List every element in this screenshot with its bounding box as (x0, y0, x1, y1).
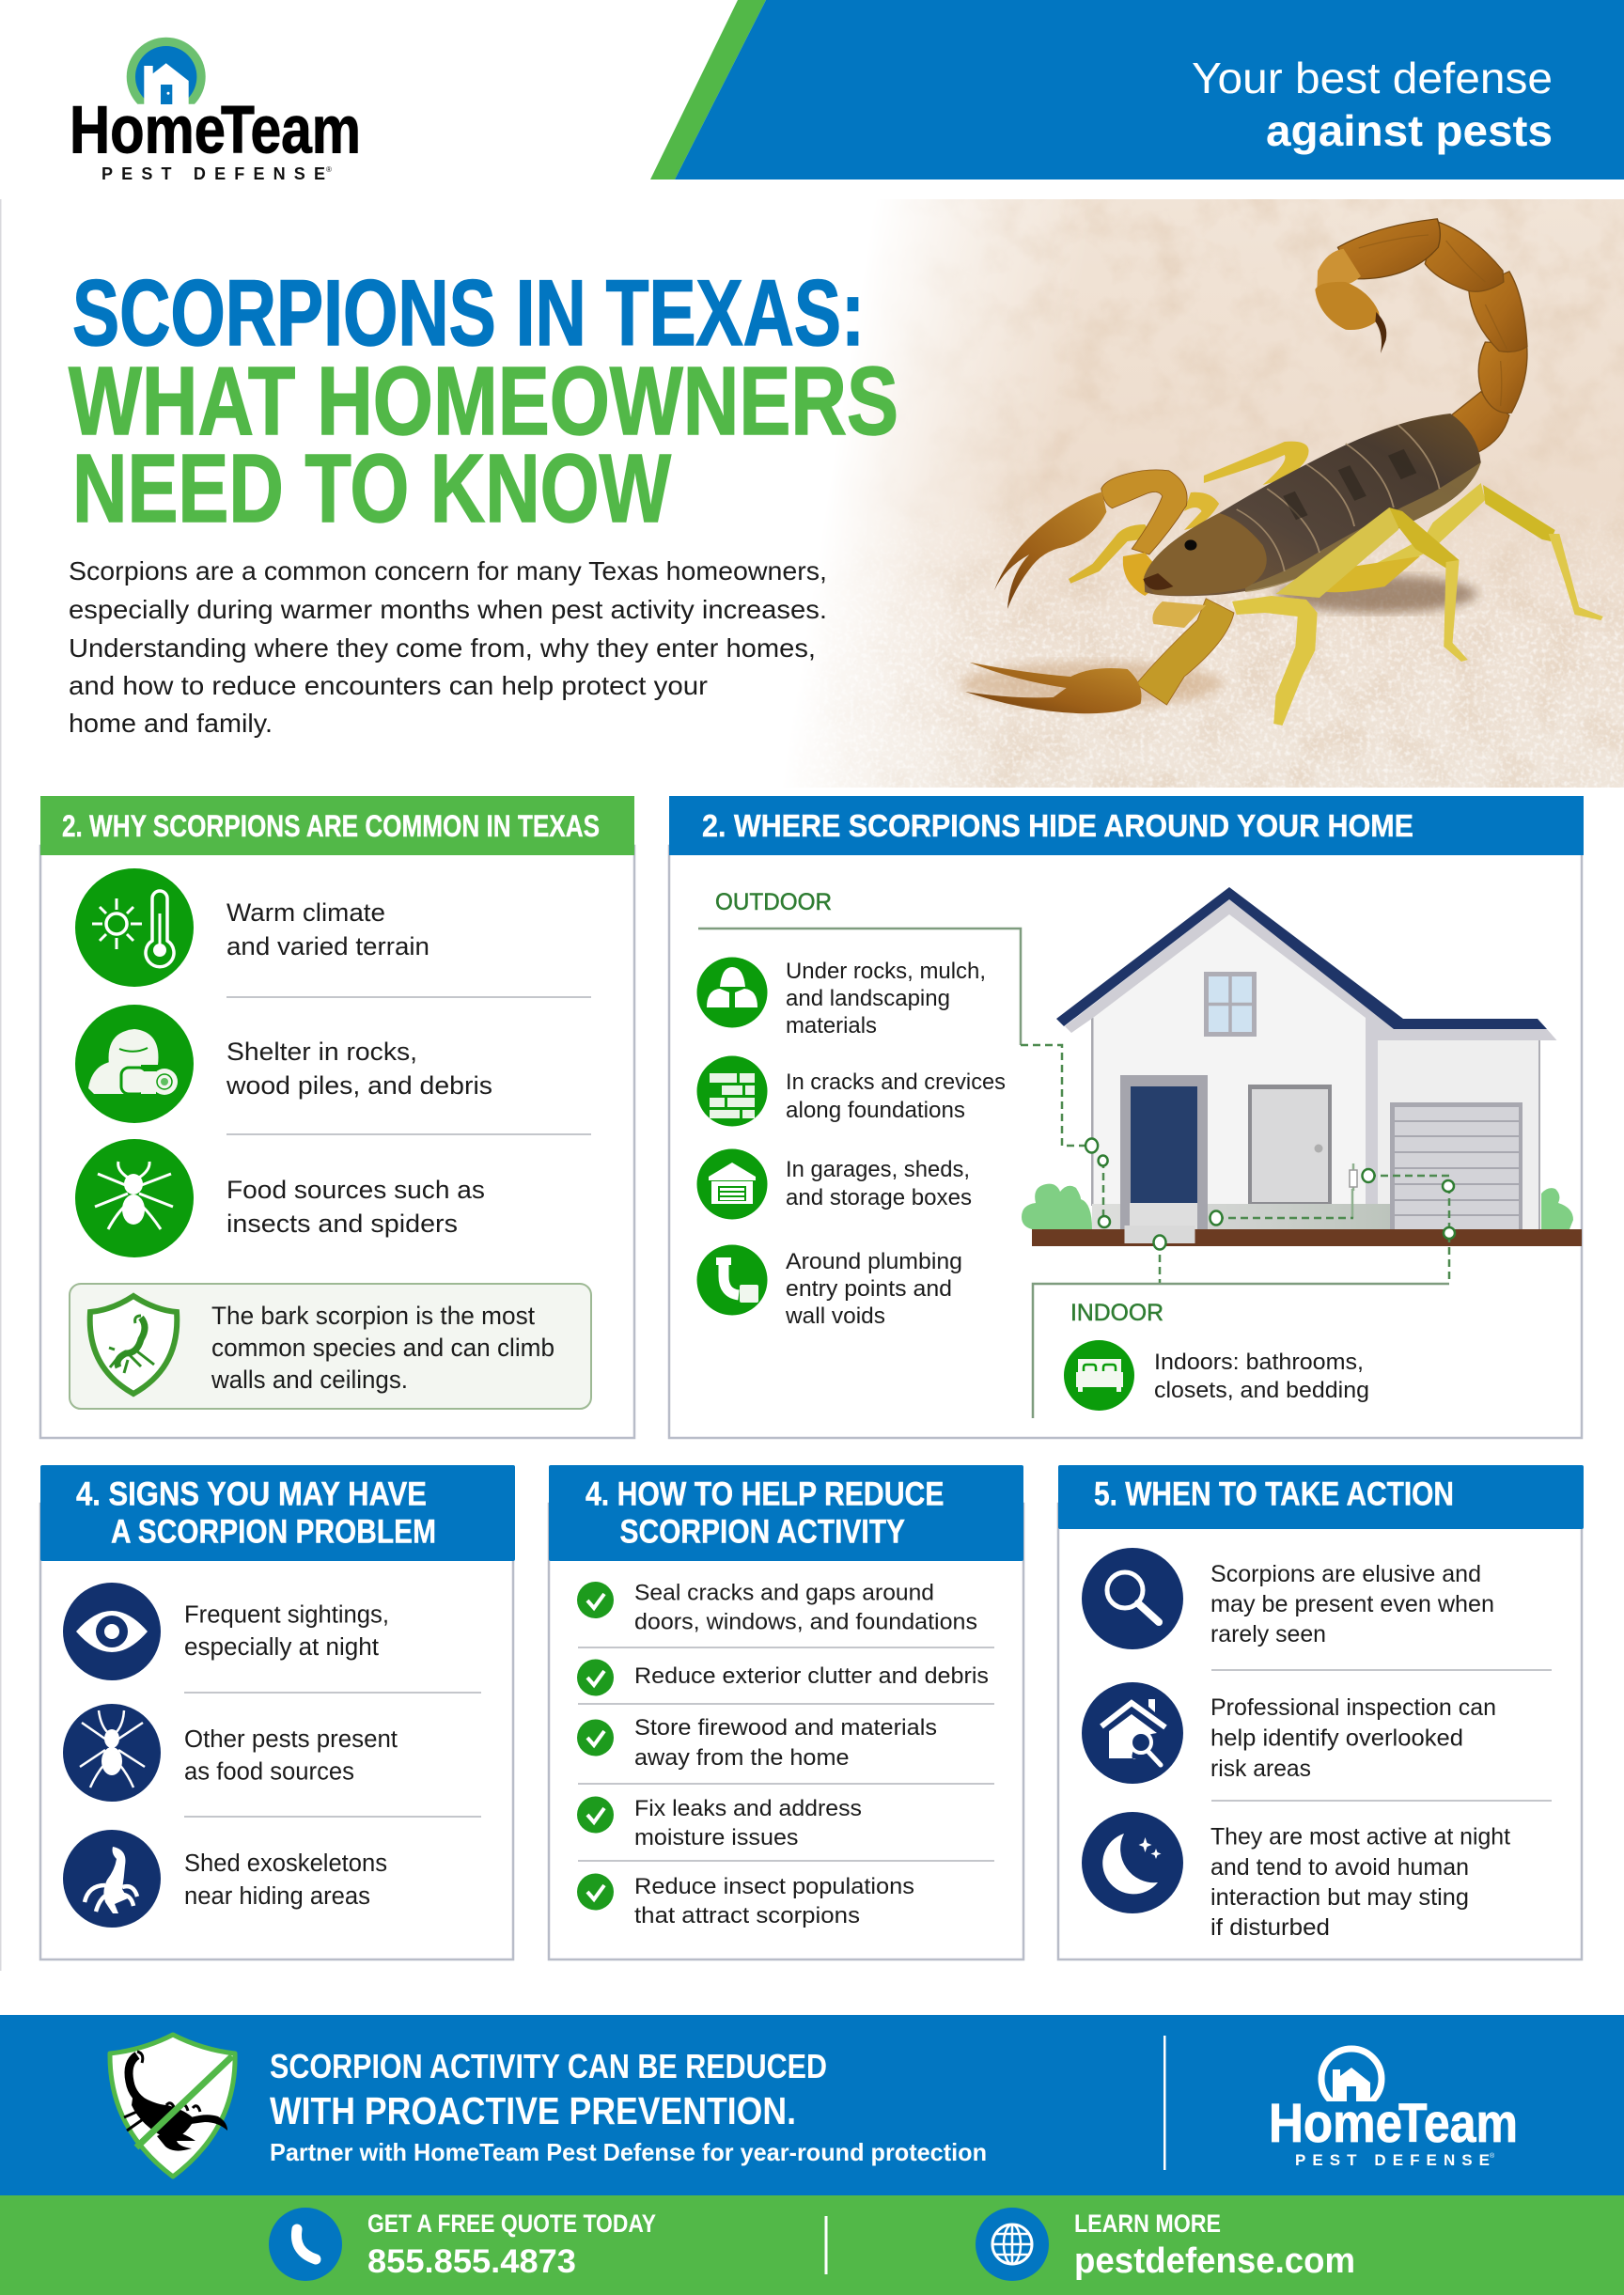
panel header: 5. WHEN TO TAKE ACTION (1094, 1475, 1454, 1513)
logo: white HomeTeam: PEST DEFENSE (1295, 2151, 1490, 2169)
text: active at night: They are most active at night (1210, 1823, 1510, 1850)
logo: white HomeTeam: Team (1398, 2093, 1518, 2154)
text: warm climate (226, 898, 429, 960)
house illustration (1021, 887, 1582, 1284)
tail segments (1451, 392, 1509, 452)
text: plumbing (785, 1249, 962, 1329)
panel: signs of a scorpion problem (40, 1465, 515, 1959)
icon: plumbing (697, 1244, 767, 1316)
text: warm climate: Warm climate (226, 898, 385, 927)
icon: bed (1064, 1340, 1134, 1411)
icon: insect (63, 1704, 161, 1802)
text: inspection (1210, 1694, 1496, 1782)
icon: brick wall (697, 1056, 767, 1126)
steps (1130, 1203, 1197, 1229)
panel header (40, 796, 634, 855)
text: website (1074, 2209, 1355, 2281)
logo: HomeTeam Pest Defense: Home (70, 94, 226, 168)
heading: outdoor: OUTDOOR (715, 889, 832, 915)
panel header: 4. HOW TO HELP REDUCE (586, 1475, 944, 1513)
outdoor bracket line (698, 929, 1021, 1045)
text: under rocks (786, 959, 986, 1038)
checklist item: firewood (577, 1715, 937, 1771)
checklist item: insects: Reduce insect populations (634, 1874, 914, 1899)
back legs (1069, 442, 1309, 584)
text: other pests (184, 1726, 398, 1786)
ground (1032, 1229, 1582, 1246)
panel header (1058, 1465, 1584, 1529)
panel header (669, 796, 1584, 855)
icon: eye (63, 1583, 161, 1680)
icon: phone (269, 2208, 342, 2281)
text: food sources: Food sources such as (226, 1176, 485, 1204)
text: active at night: interaction but may sting (1210, 1884, 1469, 1911)
callout: bark scorpion (70, 1284, 591, 1409)
text: frequent sightings: especially at night (184, 1634, 379, 1661)
tagline: against pests (1266, 106, 1553, 155)
text: warm climate: and varied terrain (226, 932, 429, 960)
panel header: SCORPION ACTIVITY (620, 1513, 905, 1551)
leader lines (1021, 1045, 1449, 1284)
title: NEED TO KNOW (72, 434, 672, 542)
foundation (1092, 1204, 1393, 1229)
checklist item: leaks: Fix leaks and address (634, 1796, 862, 1821)
title (69, 260, 898, 542)
checklist item: seal cracks: Seal cracks and gaps around (634, 1581, 934, 1605)
roof (1056, 887, 1547, 1029)
text: bark scorpion (211, 1302, 554, 1394)
contact bar (0, 2195, 1624, 2295)
text: shed exoskeletons: Shed exoskeletons (184, 1850, 387, 1877)
icon: scorpion (63, 1830, 161, 1928)
checklist item: seal cracks: doors, windows, and foundations (634, 1609, 977, 1635)
text: cracks (786, 1069, 1006, 1123)
garage door (1390, 1102, 1522, 1229)
checklist item: firewood: Store firewood and materials (634, 1715, 937, 1741)
heading: indoor: INDOOR (1070, 1300, 1163, 1326)
text: garages: and storage boxes (786, 1185, 972, 1210)
intro paragraph: and how to reduce encounters can help protect your (69, 671, 708, 700)
panel: when to take action (1058, 1465, 1584, 1959)
hero photo background (752, 199, 1624, 788)
body (1144, 414, 1481, 596)
text: elusive: may be present even when (1210, 1591, 1494, 1617)
front legs (1232, 507, 1468, 726)
text: other pests: Other pests present (184, 1726, 398, 1753)
panel header: 2. WHY SCORPIONS ARE COMMON IN TEXAS (62, 809, 600, 843)
front door (1120, 1075, 1208, 1231)
text: bark scorpion: common species and can climb (211, 1334, 554, 1362)
text: inspection: risk areas (1210, 1756, 1311, 1782)
logo: HomeTeam Pest Defense: Team (221, 94, 361, 168)
checklist item: leaks (577, 1796, 862, 1850)
logo: white HomeTeam: Home (1269, 2093, 1402, 2154)
text: bark scorpion: walls and ceilings. (211, 1366, 408, 1394)
checklist item: seal cracks (577, 1581, 977, 1635)
text: quote: 855.855.4873 (367, 2243, 576, 2280)
text: indoors (1154, 1350, 1369, 1403)
text: other pests: as food sources (184, 1759, 354, 1786)
left edge rule (0, 199, 2, 1971)
intro paragraph: Understanding where they come from, why they enter homes, (69, 633, 816, 663)
banner text (270, 2047, 987, 2166)
banner text: Partner with HomeTeam Pest Defense for year-round protection (270, 2138, 987, 2166)
text: indoors: closets, and bedding (1154, 1378, 1369, 1403)
text: cracks: along foundations (786, 1098, 965, 1123)
eye (1184, 539, 1196, 551)
checklist item: firewood: away from the home (634, 1745, 850, 1771)
logo: white HomeTeam: ® (1490, 2152, 1495, 2160)
panel header (549, 1465, 1023, 1561)
checklist item: leaks: moisture issues (634, 1825, 799, 1850)
intro paragraph (69, 556, 827, 738)
icon: sun and thermometer (75, 868, 194, 987)
intro paragraph: home and family. (69, 709, 273, 738)
text: cracks: In cracks and crevices (786, 1069, 1006, 1095)
text: plumbing: entry points and (786, 1276, 952, 1302)
panel header: 2. WHERE SCORPIONS HIDE AROUND YOUR HOME (702, 808, 1413, 843)
tagline (1192, 54, 1553, 155)
text: elusive (1210, 1561, 1494, 1647)
panel header (40, 1465, 515, 1561)
checklist item: insects (577, 1874, 914, 1928)
tagline: Your best defense (1192, 54, 1553, 102)
icon: magnifier (1082, 1548, 1183, 1649)
scorpion illustration (961, 219, 1603, 726)
logo: HomeTeam Pest Defense (70, 38, 361, 183)
icon: shield with scorpion (90, 1296, 177, 1394)
logo: HomeTeam Pest Defense: PEST DEFENSE (102, 164, 325, 183)
text: bark scorpion: The bark scorpion is the most (211, 1302, 536, 1330)
intro paragraph: especially during warmer months when pest activity increases. (69, 595, 827, 624)
indoor bracket line (1033, 1284, 1449, 1418)
title: WHAT HOMEOWNERS (69, 347, 898, 455)
far right legs (1354, 483, 1603, 620)
text: garages (786, 1157, 972, 1210)
walls (1092, 914, 1366, 1229)
icon: rocks (697, 957, 767, 1028)
upper pincer (1101, 470, 1187, 554)
panel header: 4. SIGNS YOU MAY HAVE (76, 1475, 427, 1513)
text: plumbing: wall voids (785, 1304, 885, 1329)
text: plumbing: Around plumbing (786, 1249, 962, 1274)
text: active at night: and tend to avoid human (1210, 1854, 1469, 1881)
text: active at night (1210, 1823, 1510, 1941)
icon: spider (75, 1139, 194, 1257)
lower pincer (1136, 599, 1234, 705)
text: frequent sightings (184, 1601, 389, 1661)
text: shelter: Shelter in rocks, (226, 1038, 417, 1066)
text: website: pestdefense.com (1074, 2241, 1355, 2281)
header banner (650, 0, 1624, 180)
panel: where scorpions hide (669, 796, 1584, 1438)
panel: why scorpions are common in Texas (40, 796, 634, 1438)
text: inspection: Professional inspection can (1210, 1694, 1496, 1721)
icon: moon and stars (1082, 1812, 1183, 1913)
belly (1320, 556, 1420, 592)
text: under rocks: materials (786, 1013, 877, 1038)
banner text: WITH PROACTIVE PREVENTION. (270, 2089, 796, 2132)
text: quote (367, 2209, 656, 2280)
text: indoors: Indoors: bathrooms, (1154, 1350, 1364, 1375)
intro paragraph: Scorpions are a common concern for many Texas homeowners, (69, 556, 827, 585)
text: under rocks: Under rocks, mulch, (786, 959, 986, 984)
text: frequent sightings: Frequent sightings, (184, 1601, 389, 1628)
second door (1248, 1085, 1332, 1204)
attic window (1204, 972, 1257, 1037)
fascia (1065, 899, 1394, 1040)
banner text: SCORPION ACTIVITY CAN BE REDUCED (270, 2047, 827, 2085)
text: quote: GET A FREE QUOTE TODAY (367, 2209, 656, 2238)
icon: house with magnifier (1082, 1682, 1183, 1784)
bushes (1022, 1184, 1573, 1229)
title: SCORPIONS IN TEXAS: (72, 260, 865, 365)
text: shed exoskeletons (184, 1850, 387, 1910)
text: shelter (226, 1038, 492, 1100)
pipe (1352, 1163, 1353, 1218)
text: elusive: Scorpions are elusive and (1210, 1561, 1481, 1587)
checklist item: clutter: Reduce exterior clutter and debris (634, 1663, 989, 1689)
icon: rocks and wood (75, 1005, 194, 1123)
checklist item: insects: that attract scorpions (634, 1903, 860, 1928)
text: shed exoskeletons: near hiding areas (184, 1883, 370, 1910)
text: inspection: help identify overlooked (1210, 1725, 1463, 1752)
callout nodes (1085, 1139, 1455, 1250)
text: shelter: wood piles, and debris (226, 1071, 492, 1100)
logo: white HomeTeam (1269, 2049, 1518, 2169)
panel header: A SCORPION PROBLEM (111, 1513, 436, 1551)
checklist item: clutter (577, 1660, 989, 1695)
text: under rocks: and landscaping (786, 986, 950, 1011)
icon: globe (976, 2208, 1049, 2281)
text: website: LEARN MORE (1074, 2209, 1221, 2238)
text: garages: In garages, sheds, (786, 1157, 970, 1182)
text: active at night: if disturbed (1210, 1914, 1330, 1941)
logo: HomeTeam Pest Defense: ® (326, 165, 332, 174)
text: food sources: insects and spiders (226, 1210, 458, 1238)
icon: shield with crossed scorpion (110, 2035, 235, 2177)
text: elusive: rarely seen (1210, 1621, 1326, 1647)
text: food sources (226, 1176, 485, 1238)
panel: how to reduce scorpion activity (549, 1465, 1023, 1959)
icon: garage (697, 1148, 767, 1220)
banner: proactive prevention (0, 2015, 1624, 2195)
